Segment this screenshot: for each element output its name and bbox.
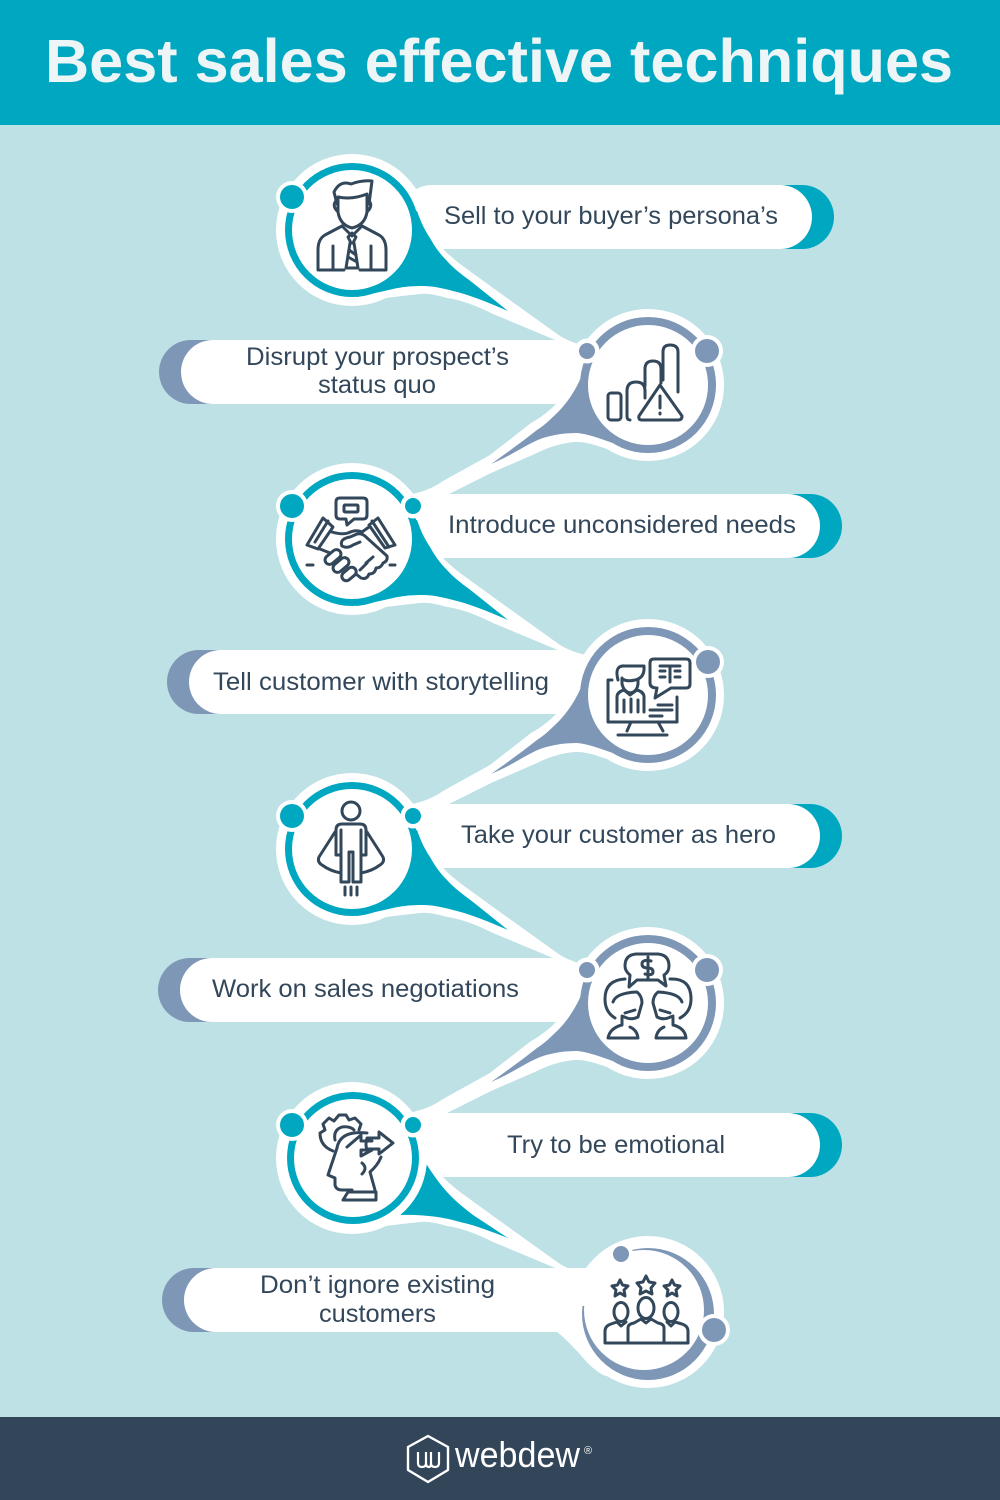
pill 8	[162, 1268, 591, 1332]
label 8: customers	[319, 1300, 436, 1328]
icon: hero with cape	[318, 802, 384, 895]
label 1: Sell to your buyer’s persona’s	[444, 202, 778, 230]
pill 5	[400, 804, 842, 868]
icon: businessman	[318, 181, 386, 270]
logo	[408, 1434, 592, 1482]
label 8	[260, 1271, 495, 1328]
pin 8	[545, 1236, 730, 1388]
icon: head with gear and arrows	[320, 1115, 393, 1200]
pin 7	[276, 1082, 597, 1283]
label 3: Introduce unconsidered needs	[448, 511, 796, 539]
header band	[0, 0, 1000, 125]
label 6: Work on sales negotiations	[212, 975, 519, 1003]
icon: negotiation	[605, 954, 691, 1038]
pin 6	[408, 927, 724, 1128]
label 2	[246, 343, 509, 399]
label 4: Tell customer with storytelling	[213, 668, 549, 696]
pin 2	[408, 309, 724, 510]
label 8: Don’t ignore existing	[260, 1271, 495, 1299]
icon: storytelling monitor	[608, 659, 690, 735]
pin 5	[276, 773, 597, 974]
title: Best sales effective techniques	[45, 27, 953, 95]
logo: ®	[584, 1445, 592, 1457]
pin 3	[276, 463, 597, 664]
pill 1	[400, 185, 834, 249]
label 2: Disrupt your prospect’s	[246, 343, 509, 371]
label 2: status quo	[318, 371, 436, 399]
pill 3	[400, 494, 842, 558]
label 7: Try to be emotional	[507, 1131, 725, 1159]
logo: webdew	[454, 1434, 581, 1475]
pill 4	[167, 650, 591, 714]
pin 1	[276, 154, 597, 355]
pill 2	[159, 340, 591, 404]
pill 6	[158, 958, 591, 1022]
footer band	[0, 1417, 1000, 1500]
pin 4	[408, 619, 724, 820]
label 5: Take your customer as hero	[461, 821, 776, 849]
pill 7	[400, 1113, 842, 1177]
icon: handshake	[307, 498, 395, 583]
icon: rated customers	[605, 1276, 688, 1343]
icon: chart with warning	[608, 345, 682, 420]
